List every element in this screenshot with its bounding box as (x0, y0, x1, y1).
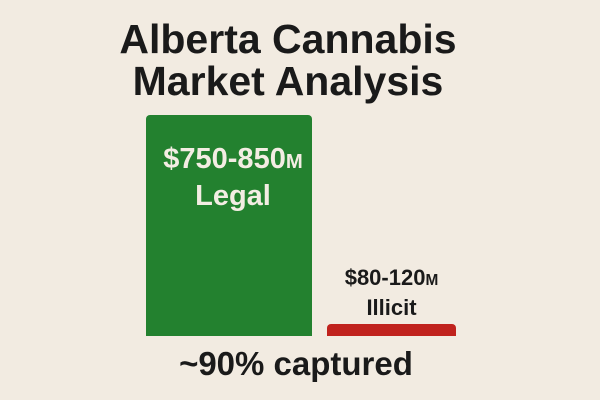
label: illicit value: $80-120M (345, 265, 438, 290)
title (119, 16, 457, 104)
label: legal value (163, 143, 303, 212)
bar: legal (146, 115, 312, 336)
title: Market Analysis (133, 58, 443, 104)
label: legal value: Legal (195, 180, 271, 212)
label: legal value: $750-850M (163, 143, 303, 175)
caption: ~90% captured (179, 345, 413, 382)
bar: illicit (327, 324, 456, 336)
label: illicit value: Illicit (366, 295, 417, 320)
label: illicit value (345, 265, 438, 320)
title: Alberta Cannabis (119, 16, 457, 62)
